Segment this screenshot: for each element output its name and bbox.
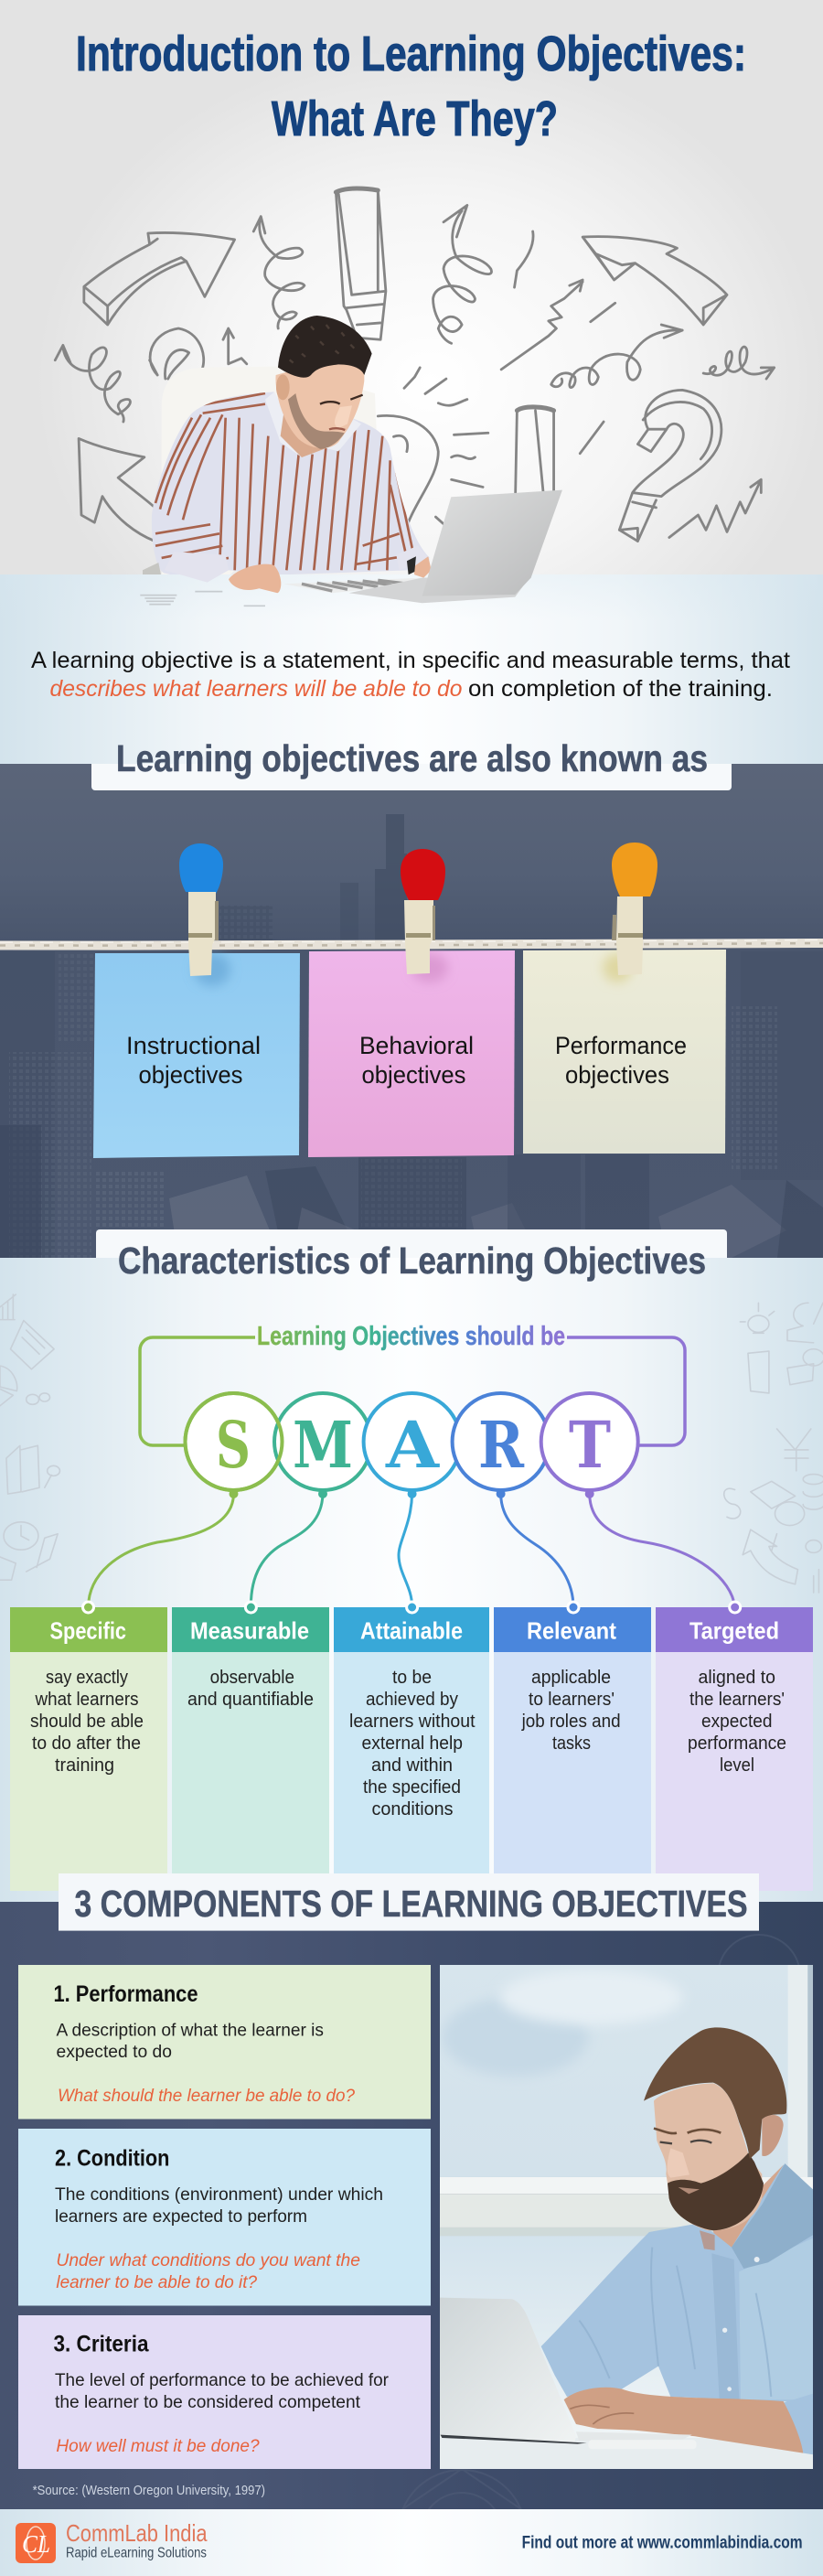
- icon: curved arrow top right: [583, 237, 727, 325]
- column: specific: training: [55, 1755, 114, 1776]
- brand name: CommLab India: [66, 2519, 208, 2547]
- card: criteria: the learner to be considered competent: [55, 2392, 361, 2412]
- column: relevant: [494, 1607, 651, 1891]
- keyboard deck: [576, 2431, 691, 2438]
- city background: [0, 814, 823, 1258]
- smart subtitle: Learning Objectives should be: [257, 1322, 565, 1351]
- smart letters: M: [293, 1407, 353, 1483]
- icon: dashes around bulb: [404, 368, 604, 526]
- shirt: [152, 392, 430, 583]
- beard stubble: [288, 393, 345, 449]
- hair: [644, 2027, 786, 2159]
- photo: man at laptop: [143, 316, 430, 583]
- face: [275, 363, 364, 448]
- footer: [0, 2509, 823, 2576]
- column: specific: what learners: [35, 1690, 139, 1710]
- watch: [407, 556, 416, 574]
- clothespin: orange: [612, 843, 657, 975]
- sticky note: performance: Performance: [555, 1032, 687, 1059]
- icon: zigzag lower right: [669, 479, 761, 538]
- icon: zigzag arrow: [501, 280, 615, 370]
- tagline: Rapid eLearning Solutions: [66, 2546, 207, 2561]
- smart letters: S: [216, 1407, 251, 1483]
- clothespin: red: [401, 849, 445, 974]
- icon: light bulb outline: [378, 415, 438, 533]
- collar left: [700, 2230, 715, 2250]
- brows and eyes: [654, 2129, 721, 2133]
- hair: [278, 316, 372, 378]
- column: measurable: Measurable: [190, 1617, 309, 1645]
- ear: [762, 2115, 784, 2156]
- sticky note: instructional: Instructional: [126, 1032, 261, 1059]
- card: performance: A description of what the learner is: [57, 2020, 324, 2040]
- card: criteria: 3. Criteria: [53, 2332, 149, 2357]
- column: attainable: achieved by: [366, 1690, 458, 1710]
- smart letters: R: [478, 1407, 525, 1483]
- connector dots under circles: [229, 1489, 594, 1498]
- heading box: [96, 1229, 727, 1258]
- column: specific: to do after the: [32, 1733, 141, 1754]
- right hand: [413, 556, 432, 578]
- nose highlight: [335, 405, 352, 428]
- icon: curved arrow top left: [84, 232, 235, 325]
- panel: three components: [0, 1873, 823, 2576]
- faint doodles left: [0, 1294, 59, 1580]
- laptop base: [349, 576, 530, 603]
- column: targeted: Targeted: [689, 1617, 779, 1645]
- sticky note: performance: objectives: [565, 1061, 669, 1089]
- column: attainable: and within: [371, 1755, 453, 1776]
- icon: spiral arrow left: [55, 345, 130, 422]
- card: performance: What should the learner be able to do?: [58, 2086, 355, 2106]
- card: performance: [18, 1965, 431, 2119]
- card: condition: learners are expected to perform: [55, 2206, 307, 2227]
- card: condition: Under what conditions do you want the: [56, 2250, 360, 2270]
- nose: [668, 2148, 689, 2178]
- beard: [668, 2152, 764, 2230]
- icon: spiral arrow centre: [433, 205, 492, 343]
- icon: loop arrow far right: [703, 347, 775, 379]
- card: criteria: How well must it be done?: [56, 2436, 260, 2456]
- faint dartboard background: [398, 1935, 800, 2576]
- column: targeted: the learners': [689, 1690, 785, 1710]
- icon: small up arrow: [223, 328, 247, 364]
- forearm and hand: [564, 2388, 803, 2453]
- column: specific: say exactly: [46, 1668, 128, 1688]
- icon: curly arrow right: [551, 325, 682, 388]
- clothespin: blue: [179, 843, 223, 976]
- smart letters: T: [569, 1407, 611, 1483]
- keyboard: [283, 578, 422, 593]
- column: attainable: conditions: [371, 1799, 454, 1819]
- card: condition: The conditions (environment) under which: [55, 2184, 383, 2205]
- definition text: on completion of the training.: [468, 676, 773, 702]
- icon: question curl behind chair: [150, 328, 204, 379]
- smart circles: [185, 1393, 638, 1490]
- eyes and brow: [320, 395, 363, 404]
- column: measurable: observable: [210, 1668, 294, 1688]
- panel: characteristics: [0, 1229, 823, 1902]
- papers on desk: [140, 592, 265, 606]
- neck: [713, 2165, 786, 2252]
- title: [76, 27, 746, 146]
- laptop base: [441, 2435, 587, 2444]
- clothesline rope: [0, 940, 823, 946]
- face: [654, 2083, 762, 2230]
- column: targeted: aligned to: [699, 1668, 775, 1688]
- column: targeted: level: [720, 1755, 754, 1776]
- definition text: [31, 648, 790, 702]
- sticky note: behavioral: objectives: [362, 1061, 466, 1089]
- heading box: [59, 1873, 759, 1931]
- icon: arrow lower left: [79, 438, 155, 542]
- card: condition: learner to be able to do it?: [56, 2272, 257, 2292]
- connector curves: [88, 1494, 735, 1607]
- title: What Are They?: [272, 91, 558, 146]
- phone: [588, 2440, 697, 2449]
- heading box: [91, 764, 732, 790]
- logo icon: [16, 2523, 56, 2563]
- icon: small squiggle: [515, 231, 533, 287]
- shirt collar: [732, 2163, 813, 2269]
- column: relevant: to learners': [529, 1690, 615, 1710]
- column: attainable: Attainable: [360, 1617, 463, 1645]
- window background: [439, 1964, 814, 2442]
- band top tint: [0, 574, 823, 620]
- icon: second exclamation mark: [516, 407, 554, 493]
- column: relevant: job roles and: [521, 1712, 621, 1732]
- column: attainable: [334, 1607, 489, 1891]
- column: relevant: applicable: [531, 1668, 611, 1688]
- clothespin shadows: [194, 953, 632, 986]
- smart letters: [216, 1407, 611, 1483]
- card: performance: expected to do: [57, 2042, 172, 2062]
- placket: [711, 2253, 739, 2399]
- faint doodles right: [724, 1303, 823, 1593]
- window sill: [439, 2177, 814, 2236]
- shirt body light side: [739, 2238, 813, 2399]
- sticky note: behavioral: Behavioral: [359, 1032, 474, 1059]
- shirt cuffs: [165, 546, 430, 583]
- column: attainable: to be: [392, 1668, 432, 1688]
- column: measurable: and quantifiable: [187, 1690, 314, 1710]
- photo: man with laptop: [439, 1964, 814, 2472]
- column: targeted: performance: [688, 1733, 786, 1754]
- laptop: [439, 2298, 576, 2442]
- shirt buttons: [722, 2257, 760, 2391]
- finger lines: [570, 2405, 634, 2424]
- column: attainable: learners without: [349, 1712, 476, 1732]
- panel: also known as: [0, 737, 823, 1258]
- icon: exclamation mark: [336, 188, 386, 339]
- column: attainable: the specified: [363, 1777, 461, 1798]
- sticky note: instructional: objectives: [139, 1061, 243, 1089]
- smart letters: A: [385, 1407, 441, 1483]
- shirt: [541, 2165, 813, 2403]
- blue-white band with definition: [0, 574, 823, 765]
- icon: spiral arrow left of exclamation: [253, 217, 305, 328]
- source: *Source: (Western Oregon University, 1997): [33, 2483, 265, 2498]
- definition text: A learning objective is a statement, in specific and measurable terms, that: [31, 648, 790, 673]
- neck: [281, 414, 326, 457]
- card: criteria: The level of performance to be achieved for: [55, 2370, 389, 2390]
- column: targeted: expected: [701, 1712, 772, 1732]
- box dots: [82, 1602, 741, 1613]
- chair arm: [143, 563, 161, 574]
- heading: Characteristics of Learning Objectives: [118, 1240, 706, 1282]
- column: relevant: Relevant: [527, 1617, 616, 1645]
- bracket lines: [140, 1337, 685, 1445]
- chair: [162, 367, 377, 576]
- laptop screen: [422, 490, 562, 596]
- sleeve right: [784, 2394, 813, 2454]
- shirt wrinkles: [579, 2248, 771, 2397]
- desk: [439, 2438, 814, 2472]
- left hand: [229, 564, 281, 593]
- card: condition: [18, 2129, 431, 2305]
- papers, hands and laptop: [140, 490, 562, 606]
- background: top section: [0, 0, 823, 585]
- sticky note: performance: [523, 950, 726, 1154]
- definition text: describes what learners will be able to do: [49, 676, 463, 702]
- column: targeted: [656, 1607, 813, 1891]
- sticky note: behavioral: [308, 950, 515, 1157]
- card: condition: 2. Condition: [55, 2146, 169, 2172]
- doodle illustration: [55, 188, 775, 542]
- ear: [276, 374, 290, 400]
- icon: question mark: [619, 390, 721, 542]
- column: specific: [10, 1607, 167, 1891]
- column: specific: should be able: [30, 1712, 144, 1732]
- mouth: [329, 428, 345, 430]
- lips: [679, 2187, 700, 2194]
- card: criteria: [18, 2315, 431, 2469]
- column: specific: Specific: [49, 1617, 126, 1645]
- heading: Learning objectives are also known as: [116, 737, 708, 779]
- column: relevant: tasks: [552, 1733, 591, 1754]
- card: performance: 1. Performance: [53, 1981, 198, 2007]
- logo icon: CL: [22, 2530, 50, 2558]
- column: attainable: external help: [362, 1733, 463, 1754]
- column: measurable: [172, 1607, 329, 1891]
- sticky note: instructional: [93, 953, 300, 1158]
